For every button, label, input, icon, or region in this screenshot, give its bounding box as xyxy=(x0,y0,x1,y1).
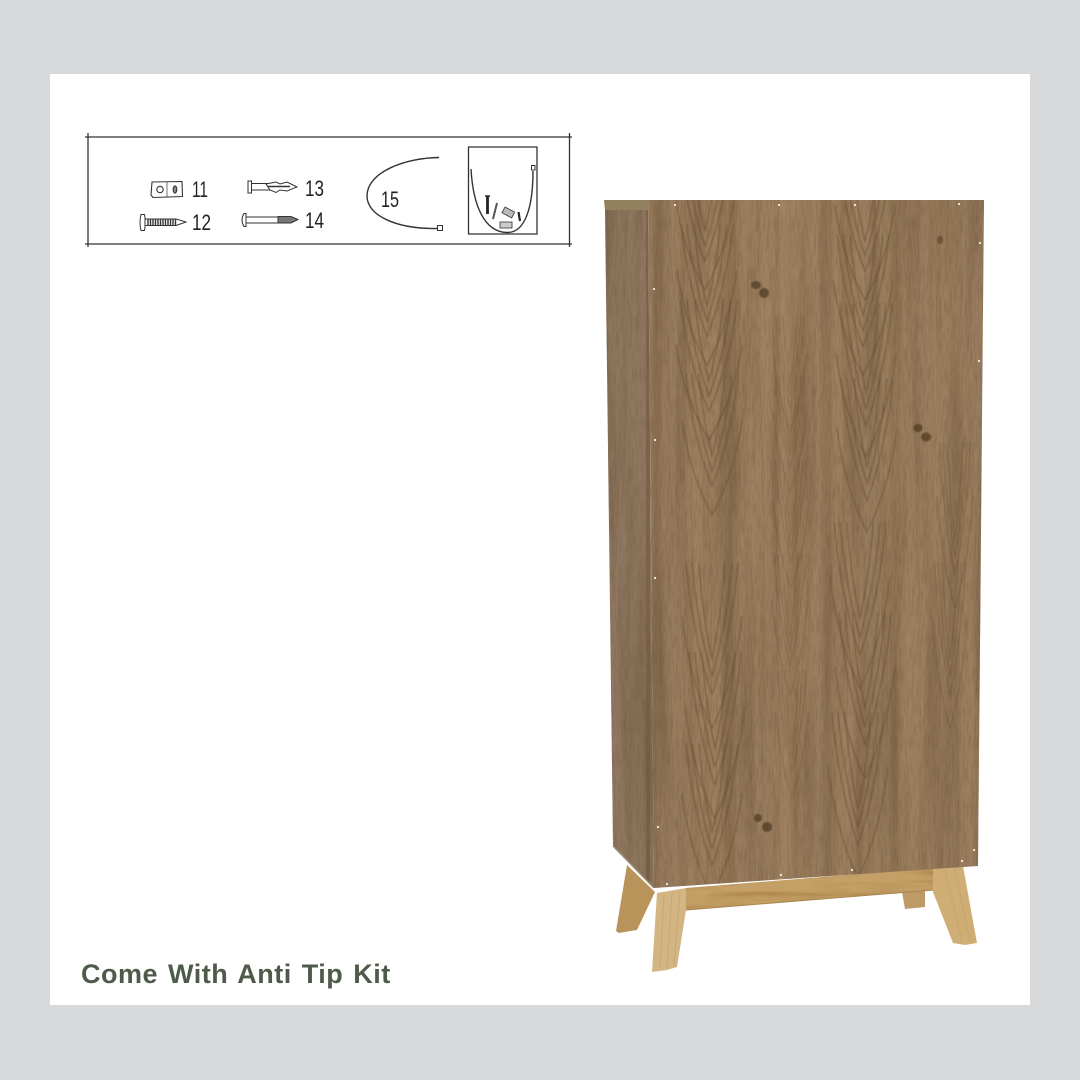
front-right leg xyxy=(933,866,977,945)
front-left leg xyxy=(652,888,686,972)
wood cathedral grain xyxy=(675,149,973,897)
label: 13: 13 xyxy=(305,176,324,201)
screw dots xyxy=(653,203,981,885)
icon: packaged kit bag xyxy=(468,147,537,234)
wooden cabinet, rear view xyxy=(600,149,987,972)
hardware kit diagram xyxy=(85,133,572,247)
label: 11: 11 xyxy=(192,177,208,202)
label: 12: 12 xyxy=(192,210,211,235)
icon: wall anchor I3 xyxy=(248,181,297,193)
label: 15: 15 xyxy=(381,187,399,212)
back panel xyxy=(645,149,987,897)
icon: bracket plate I1 xyxy=(151,182,182,198)
plank shading xyxy=(652,200,897,890)
kit frame xyxy=(85,133,572,247)
caption: Come With Anti Tip Kit xyxy=(81,959,391,989)
white panel xyxy=(50,74,1030,1005)
back-left leg xyxy=(616,865,655,933)
icon: screw I2 xyxy=(140,214,186,230)
rear rail xyxy=(686,869,933,910)
top edge xyxy=(604,200,648,210)
infographic canvas xyxy=(50,74,1030,1005)
wood knots xyxy=(751,236,943,832)
side panel xyxy=(605,210,654,888)
icon: anti tip strap I5 xyxy=(367,158,442,230)
label: 14: 14 xyxy=(305,208,324,233)
icon: long screw I4 xyxy=(242,214,298,226)
back-right leg xyxy=(902,890,925,909)
